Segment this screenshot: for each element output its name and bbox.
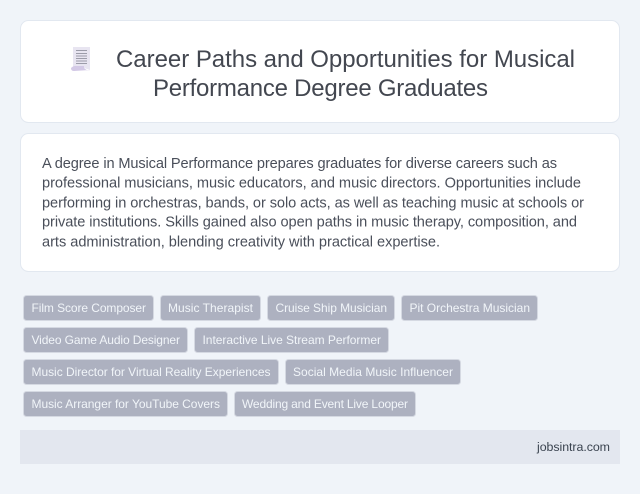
heading: Performance Degree Graduates — [153, 75, 488, 102]
footer text: jobsintra.com — [536, 440, 610, 454]
text block: description: professional musicians, music educators, and music directors. Opportunities include — [42, 176, 581, 192]
tag: Music Therapist: Music Therapist — [168, 301, 254, 315]
tag: Music Therapist — [160, 296, 260, 320]
tag: Cruise Ship Musician — [268, 296, 394, 320]
text block: description: private institutions. Skills gained also open paths in music therapy, composition, and — [42, 214, 577, 230]
text block: description — [42, 156, 584, 250]
tag: Video Game Audio Designer: Video Game Audio Designer — [32, 333, 180, 347]
panel: title card — [20, 20, 620, 122]
tag: Pit Orchestra Musician — [402, 296, 538, 320]
panel: description — [20, 134, 620, 272]
text block: description: performing in orchestras, bands, or solo acts, as well as teaching music at schools or — [42, 196, 584, 212]
tag: Interactive Live Stream Performer: Interactive Live Stream Performer — [202, 333, 381, 347]
tag: Film Score Composer: Film Score Composer — [32, 301, 146, 315]
heading — [116, 46, 575, 102]
tag: Music Director for Virtual Reality Experiences — [24, 360, 278, 384]
tag list — [24, 296, 538, 416]
tag: Social Media Music Influencer — [286, 360, 460, 384]
tag: Wedding and Event Live Looper: Wedding and Event Live Looper — [242, 397, 408, 411]
heading: Career Paths and Opportunities for Musical — [116, 46, 575, 73]
tag: Wedding and Event Live Looper — [234, 392, 416, 416]
tag: Interactive Live Stream Performer — [194, 328, 388, 352]
tag: Music Arranger for YouTube Covers — [24, 392, 228, 416]
footer — [20, 430, 620, 464]
tag: Music Director for Virtual Reality Experiences: Music Director for Virtual Reality Experiences — [32, 365, 270, 379]
tag: Video Game Audio Designer — [24, 328, 188, 352]
tag: Social Media Music Influencer: Social Media Music Influencer — [293, 365, 453, 379]
tag: Cruise Ship Musician: Cruise Ship Musician — [276, 301, 387, 315]
text block: description: arts administration, blending creativity with practical expertise. — [42, 234, 440, 250]
tag: Music Arranger for YouTube Covers: Music Arranger for YouTube Covers — [32, 397, 220, 411]
text block: description: A degree in Musical Performance prepares graduates for diverse careers such as — [42, 156, 557, 172]
tag: Film Score Composer — [24, 296, 154, 320]
icon: document scroll — [71, 47, 90, 71]
tag: Pit Orchestra Musician: Pit Orchestra Musician — [410, 301, 530, 315]
